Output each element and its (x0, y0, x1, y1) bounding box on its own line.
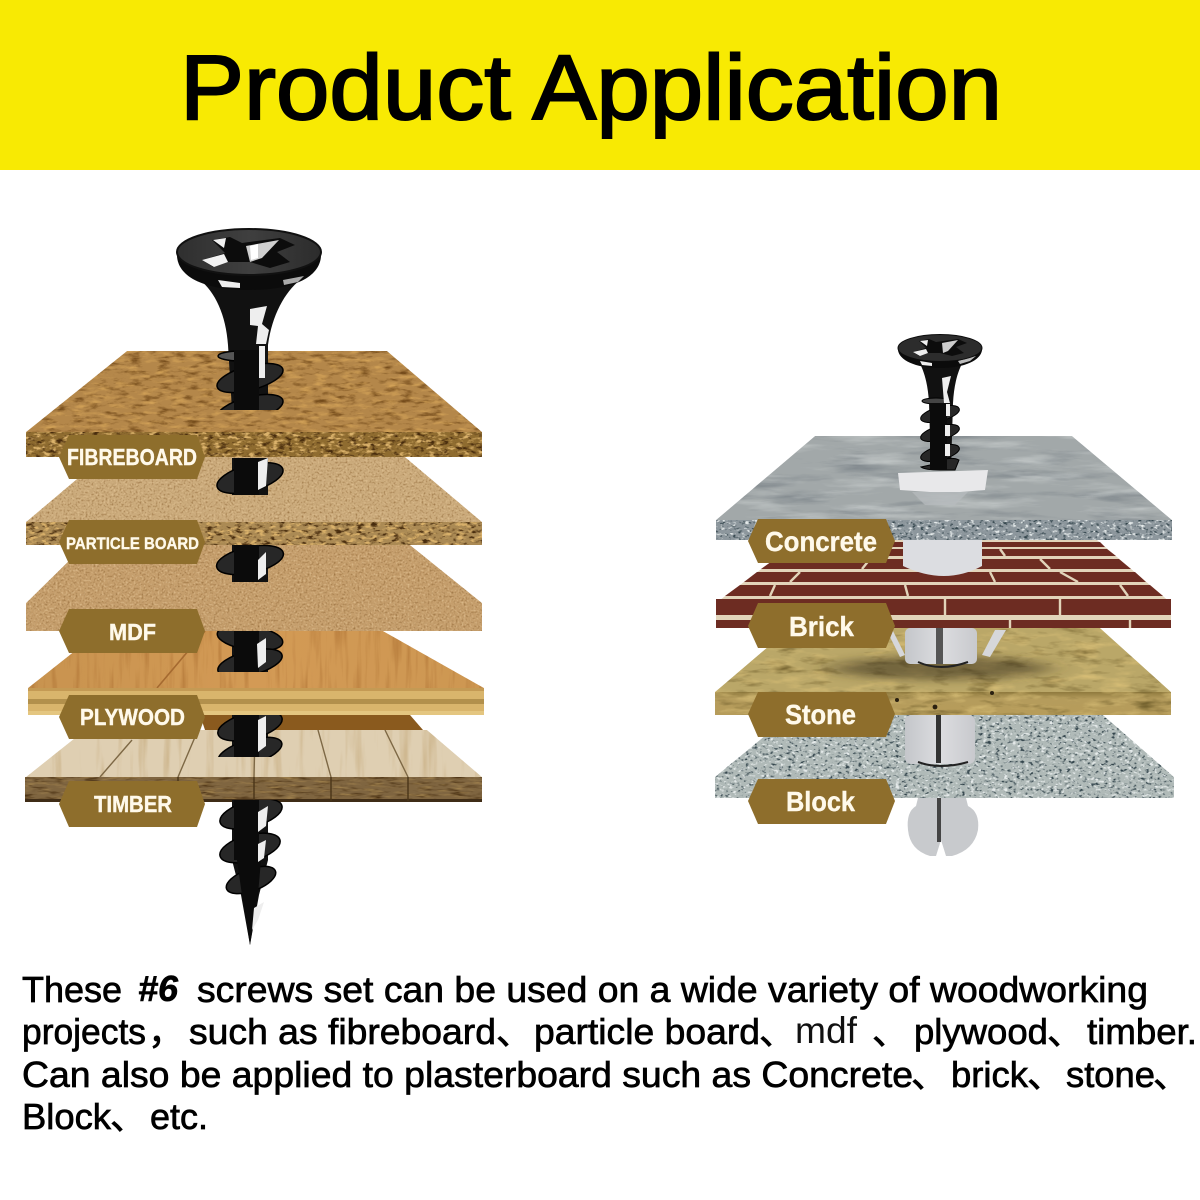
description text: 、 (872, 1011, 908, 1052)
small screw threads (919, 398, 961, 470)
panel: wood materials stack (25, 351, 484, 802)
label: block: Block (786, 786, 855, 817)
anchor leg under brick (888, 628, 1006, 667)
label: block (748, 779, 895, 824)
labels: masonry materials (748, 519, 895, 824)
label: stone (748, 692, 895, 737)
title banner (0, 0, 1200, 170)
label: particle board (59, 520, 205, 564)
screw threads (214, 351, 286, 899)
panel: masonry materials stack (715, 436, 1174, 856)
description text: brick (951, 1054, 1029, 1095)
label: fibreboard (59, 435, 205, 479)
plywood board (28, 631, 484, 715)
label: timber (59, 781, 205, 827)
label: brick (748, 603, 895, 648)
description text (22, 968, 1197, 1137)
stone layer (715, 628, 1171, 715)
particle board (26, 457, 482, 545)
label: timber: TIMBER (94, 791, 172, 817)
block layer (715, 715, 1174, 798)
description text: ， (148, 1011, 184, 1052)
label: fibreboard: FIBREBOARD (67, 444, 197, 470)
screw head star recess (202, 237, 295, 268)
description text: etc. (150, 1096, 208, 1137)
small screw shank (918, 360, 964, 470)
label: brick: Brick (789, 611, 854, 642)
screw head top (177, 229, 321, 275)
description text: 、 (110, 1096, 146, 1137)
label: MDF: MDF (109, 619, 156, 645)
fibreboard (26, 351, 482, 457)
description text: particle board (534, 1011, 760, 1052)
screw highlights (250, 306, 269, 930)
label: particle board: PARTICLE BOARD (66, 534, 199, 553)
anchor collar (898, 470, 988, 505)
description text: 、 (1027, 1054, 1063, 1095)
label: concrete (748, 519, 895, 563)
description text: plywood (914, 1011, 1048, 1052)
screw core (234, 350, 261, 945)
small screw head (898, 350, 982, 368)
label: concrete: Concrete (765, 526, 877, 557)
description text: 、 (911, 1054, 947, 1095)
label: stone: Stone (785, 699, 856, 730)
description text: Block (22, 1096, 112, 1137)
description text: #6 (138, 968, 179, 1009)
concrete slab (716, 436, 1172, 540)
description text: such as fibreboard (189, 1011, 496, 1052)
brick layer (716, 540, 1171, 628)
description text: timber. (1087, 1011, 1197, 1052)
screw head underside (177, 256, 321, 284)
label: plywood: PLYWOOD (80, 704, 185, 730)
description text: stone (1066, 1054, 1155, 1095)
anchor leg under stone (905, 715, 975, 766)
icon: small screw (898, 334, 982, 470)
description text: 、 (759, 1011, 795, 1052)
labels: wood materials (59, 435, 205, 827)
description text: projects (22, 1011, 146, 1052)
description text: mdf (795, 1010, 858, 1051)
description text: These (22, 969, 122, 1010)
anchor body under concrete (903, 540, 982, 576)
timber board (25, 715, 482, 802)
description text: screws set can be used on a wide variety of woodworking (197, 969, 1148, 1010)
description text: 、 (1153, 1054, 1189, 1095)
anchor tip below block (908, 798, 978, 856)
label: MDF (59, 609, 205, 653)
screw shank (200, 280, 300, 945)
MDF board (26, 545, 482, 631)
description text: Can also be applied to plasterboard such as Concrete (22, 1054, 913, 1095)
icon: large screw passing through boards (177, 229, 321, 945)
description text: 、 (496, 1011, 532, 1052)
label: plywood (59, 695, 205, 739)
description text: 、 (1047, 1011, 1083, 1052)
small screw core and highlights (930, 403, 947, 470)
title: Product Application (180, 37, 1002, 139)
